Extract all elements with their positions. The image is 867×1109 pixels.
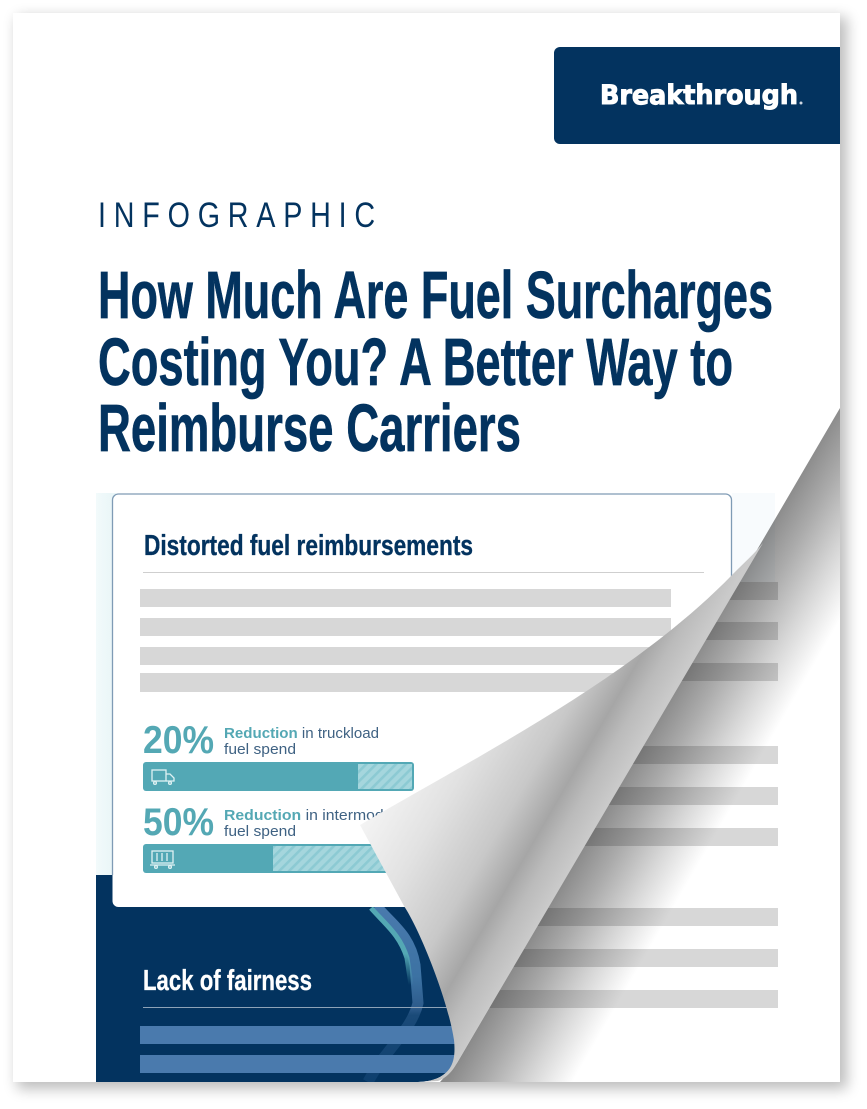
logo badge: Breakthrough: [600, 80, 798, 111]
stat: 50 percent intermodal: Reduction in intermodal: [224, 808, 396, 824]
text placeholders: [140, 1026, 460, 1073]
heading: distorted: Distorted fuel reimbursements: [144, 530, 473, 562]
stat: 20 percent truckload: 20%: [143, 719, 214, 762]
logo badge: [554, 47, 840, 144]
stat: 20 percent truckload: fuel spend: [224, 742, 296, 758]
page curl cast shadow: [440, 408, 840, 1082]
right column placeholders: [490, 582, 778, 1008]
stat: 50 percent intermodal: [143, 801, 414, 873]
stat: 20 percent truckload: Reduction in truckload: [224, 726, 379, 742]
icon: train: [150, 851, 175, 868]
panel: lack of fairness: [96, 875, 460, 1082]
stat: 50 percent intermodal: 50%: [143, 801, 214, 844]
heading: lack of fairness: Lack of fairness: [143, 965, 312, 997]
bar: truckload: [143, 762, 414, 791]
bar: intermodal: [143, 844, 414, 873]
icon: truck: [152, 770, 174, 784]
page curl: [360, 543, 763, 1082]
eyebrow: INFOGRAPHIC: INFOGRAPHIC: [98, 195, 375, 235]
panel: distorted fuel reimbursements: [112, 494, 732, 907]
document preview background: [96, 493, 775, 875]
stat: 20 percent truckload: [143, 719, 414, 791]
title: [98, 258, 773, 466]
text placeholders: [140, 589, 671, 692]
stat: 50 percent intermodal: fuel spend: [224, 824, 296, 840]
ribbon: [368, 906, 418, 1082]
title: Reimburse Carriers: [98, 391, 521, 466]
